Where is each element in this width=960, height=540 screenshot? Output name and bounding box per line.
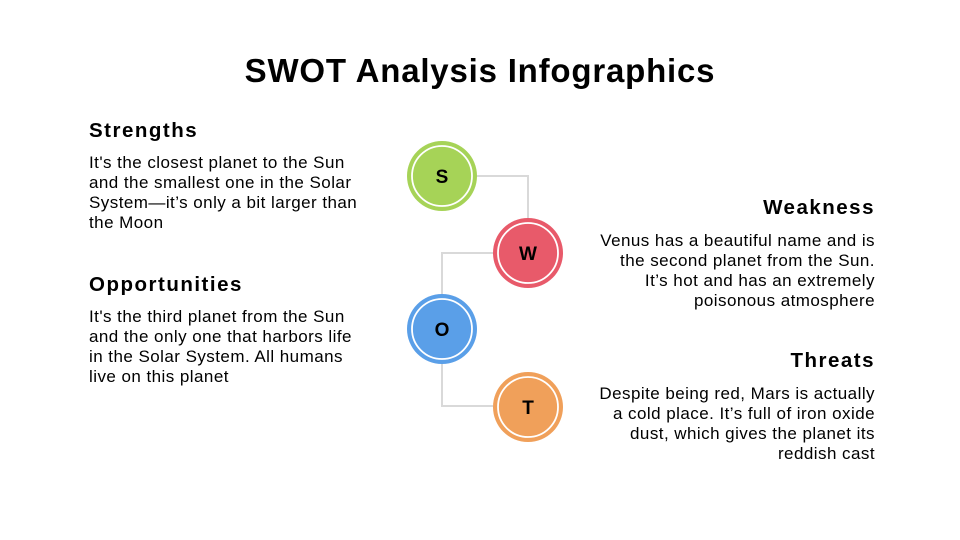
circle W [493,218,563,288]
text: strengths: and the smallest one in the Solar [89,173,351,192]
circle W: W [519,244,537,265]
text: opportunities: and the only one that harbors life [89,327,352,346]
circle S: S [436,167,448,188]
text: threats: reddish cast [778,444,875,463]
text: threats: dust, which gives the planet its [630,424,875,443]
text: strengths: System—it’s only a bit larger than [89,193,357,212]
text: opportunities: in the Solar System. All humans [89,347,343,366]
heading: strengths: Strengths [89,119,198,142]
text: weakness: It’s hot and has an extremely [645,271,875,290]
text: weakness: poisonous atmosphere [694,291,875,310]
text: opportunities: It's the third planet from the Sun [89,307,345,326]
text: strengths: the Moon [89,213,163,232]
heading: weakness: Weakness [763,196,875,219]
text: threats: Despite being red, Mars is actually [599,384,875,403]
circle O: O [435,320,449,341]
connectors [442,176,528,406]
text: strengths [89,153,357,232]
title: SWOT Analysis Infographics [245,52,715,89]
text: weakness: the second planet from the Sun. [620,251,875,270]
text: opportunities: live on this planet [89,367,229,386]
heading: threats: Threats [790,349,875,372]
text: weakness: Venus has a beautiful name and is [600,231,875,250]
text: weakness [600,231,875,310]
circle T: T [522,398,534,419]
text: threats: a cold place. It’s full of iron oxide [613,404,875,423]
circle T [493,372,563,442]
text: opportunities [89,307,352,386]
circle O [407,294,477,364]
text: threats [599,384,875,463]
text: strengths: It's the closest planet to the Sun [89,153,345,172]
circle S [407,141,477,211]
heading: opportunities: Opportunities [89,273,243,296]
